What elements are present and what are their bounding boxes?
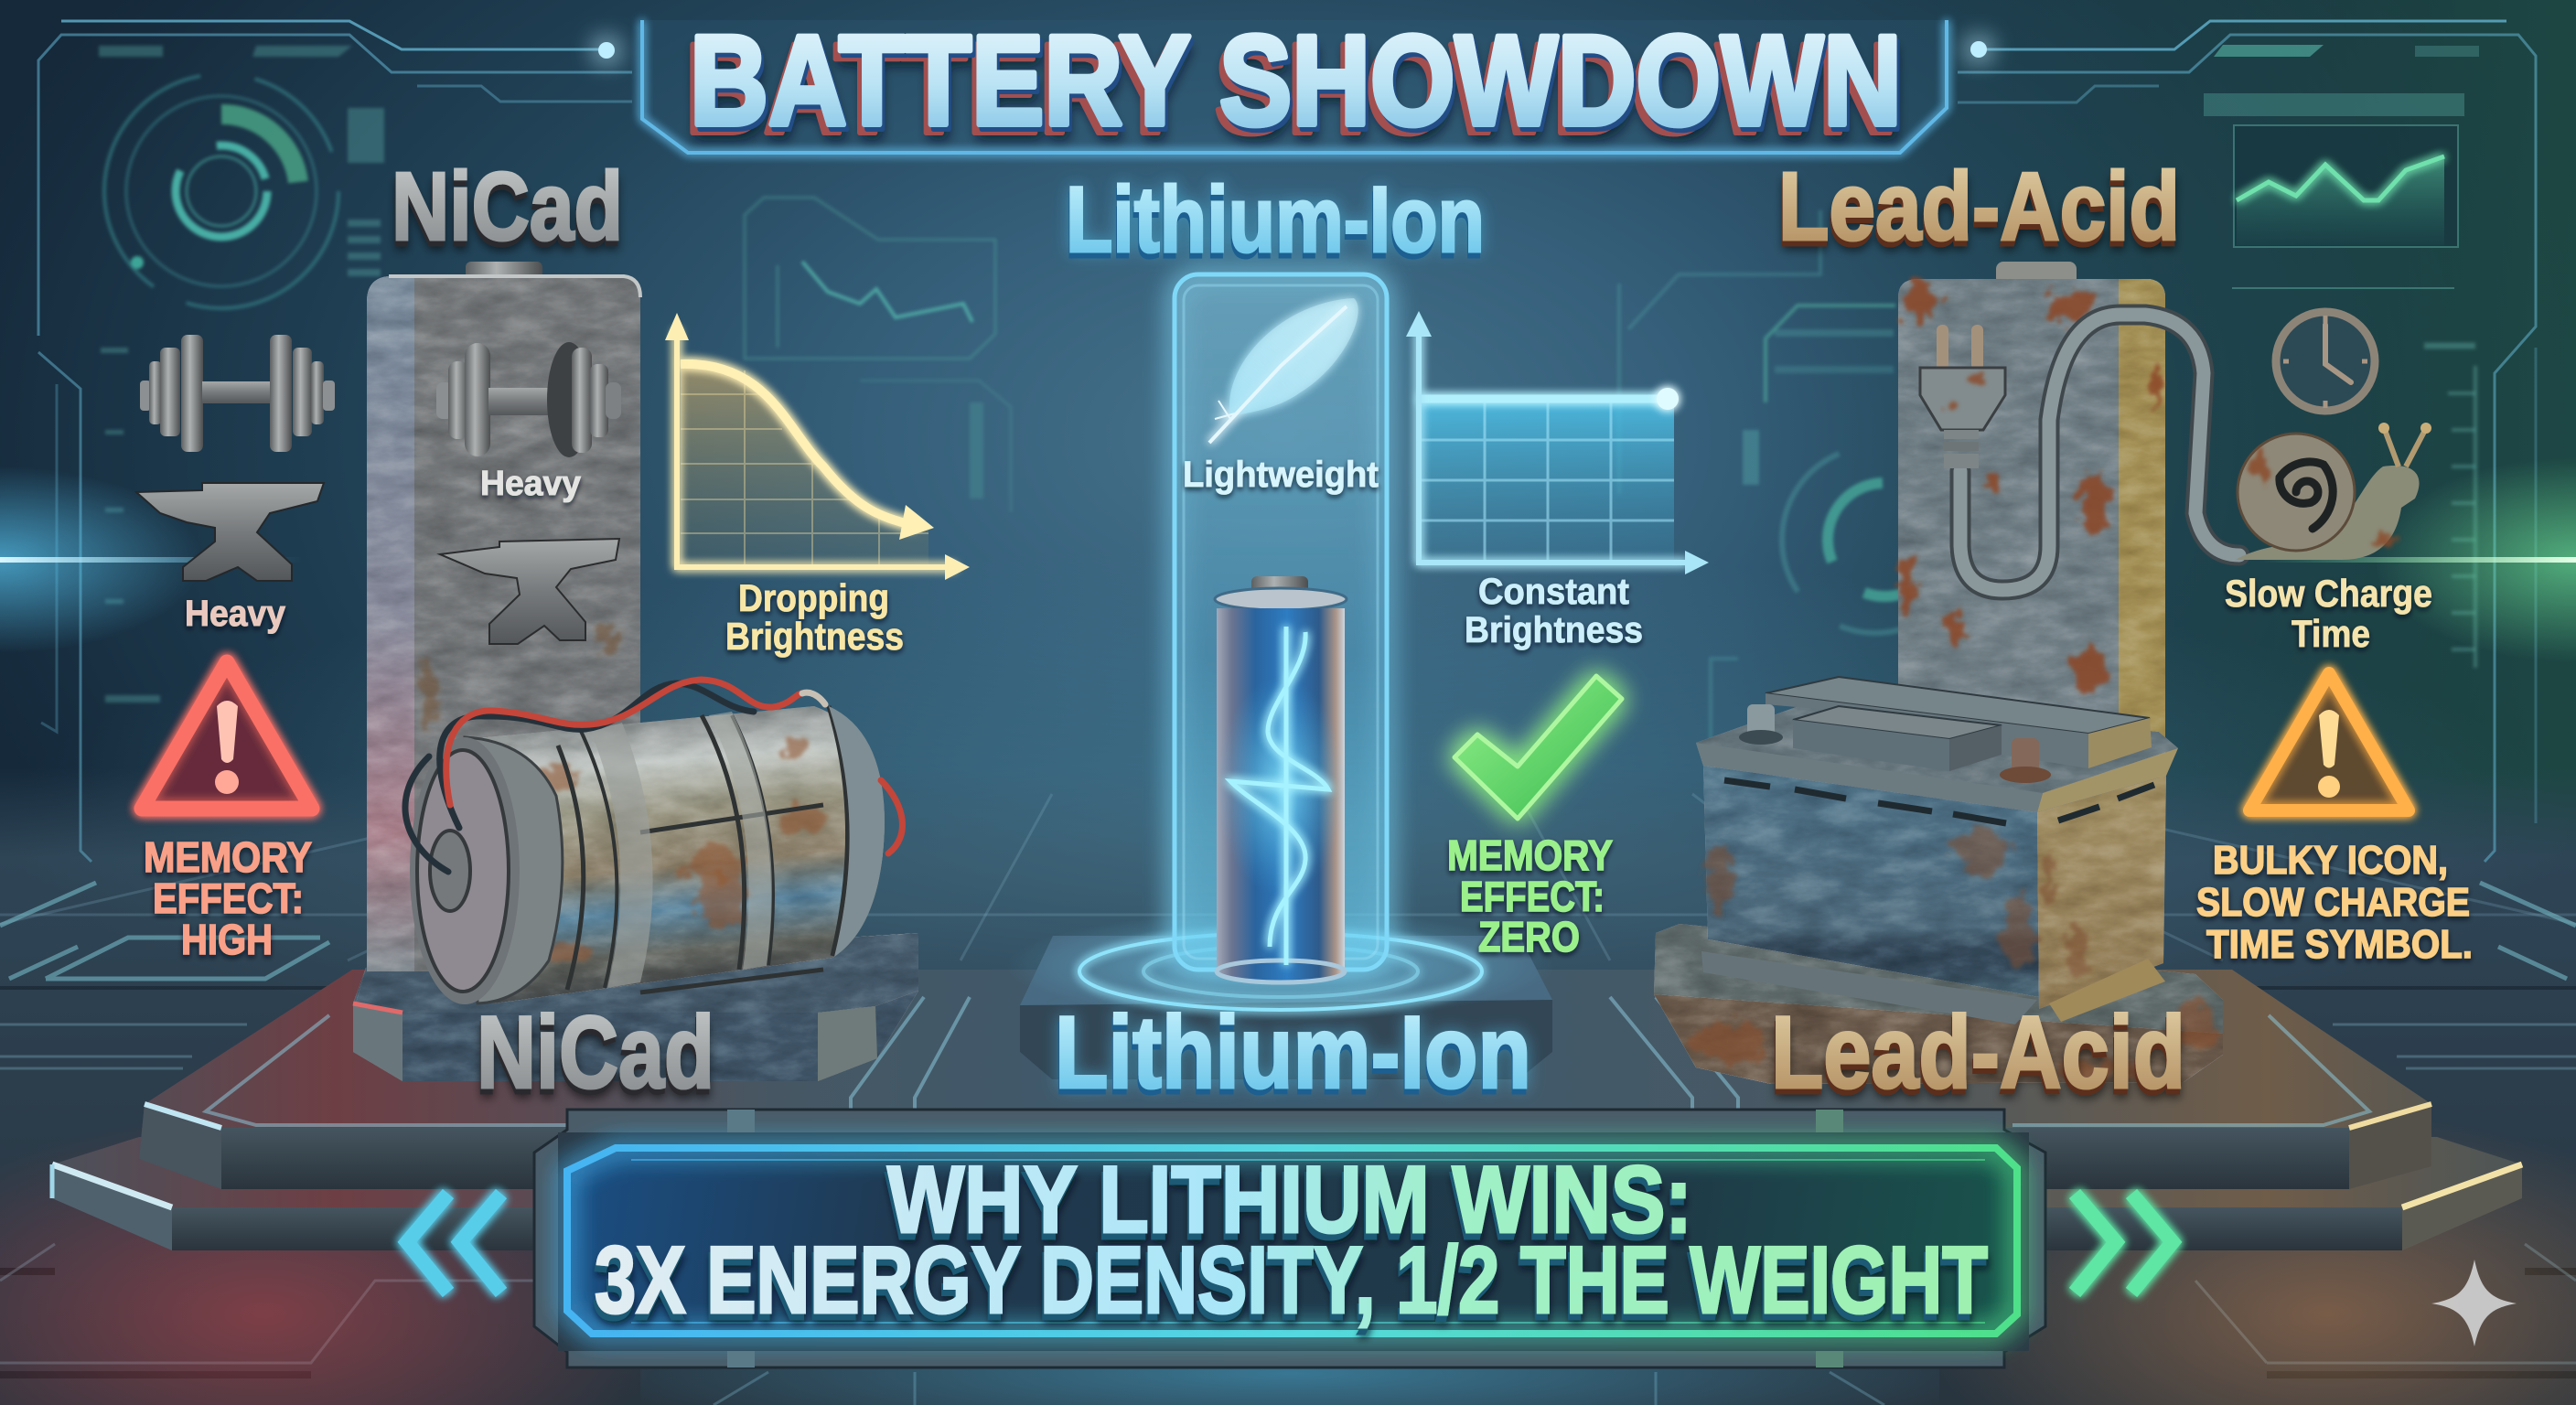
icon: plug [1920, 325, 2005, 468]
label: Heavy on slab: Heavy [480, 465, 581, 503]
icon: dumbbell [140, 335, 335, 452]
panel: constant brightness chart [1406, 311, 1709, 650]
label: bulky icon slow charge time symbol [2196, 838, 2473, 967]
icon: clock [2276, 312, 2375, 411]
label: Slow Charge Time: Slow Charge [2225, 572, 2432, 615]
floor [0, 549, 2576, 1405]
icon: anvil on slab [440, 539, 619, 644]
sparkle watermark [2431, 1260, 2517, 1346]
Lead-Acid heading: Lead-Acid [1778, 153, 2180, 261]
icon: snail [2236, 423, 2431, 560]
Lead-Acid base label: Lead-Acid [1771, 995, 2185, 1110]
label: Dropping Brightness: Dropping [738, 576, 889, 619]
label: Heavy: Heavy [185, 594, 286, 634]
memory effect zero: ZERO [1478, 913, 1580, 960]
Lead-Acid slab [1898, 262, 2165, 778]
ghost panels right of centre [1619, 210, 1969, 796]
NiCad wires [405, 680, 902, 872]
right HUD ruler [2424, 346, 2475, 668]
charging cable [1960, 315, 2239, 590]
icon: dumbbell on slab [436, 342, 621, 457]
icon: red warning triangle [142, 662, 312, 809]
panel: NiCad column [367, 262, 902, 1004]
title: BATTERY SHOWDOWN [690, 8, 1902, 152]
HUD line chart top right [2204, 45, 2479, 288]
panel: Lead-Acid right icons [2196, 312, 2473, 967]
icon: anvil [136, 483, 324, 581]
lithium cell [1215, 576, 1347, 982]
label: bulky icon slow charge time symbol: BULKY ICON, [2213, 838, 2448, 883]
banner headline [595, 1147, 1988, 1334]
panel: Lead-Acid column [1696, 262, 2239, 1024]
ghost chart behind NiCad [745, 198, 1011, 512]
glass panel [1175, 274, 1387, 970]
panel: dropping brightness chart [665, 313, 970, 658]
memory effect high [144, 833, 312, 963]
label: Slow Charge Time [2225, 572, 2432, 655]
left lens flare [0, 467, 402, 653]
Lead-Acid battery box [1696, 677, 2178, 1024]
bottom banner [534, 1110, 2045, 1367]
label: Dropping Brightness: Brightness [725, 615, 904, 658]
banner headline: WHY LITHIUM WINS: [887, 1147, 1692, 1253]
label: bulky icon slow charge time symbol: TIME SYMBOL. [2206, 922, 2473, 967]
icon: feather [1209, 298, 1358, 443]
icon: green check mark [1454, 676, 1622, 819]
label: Constant Brightness: Brightness [1465, 610, 1643, 650]
memory effect high: MEMORY [144, 833, 312, 881]
title frame [598, 20, 1987, 153]
label: Slow Charge Time: Time [2292, 612, 2370, 655]
decorative HUD circuit lines [38, 21, 2536, 862]
NiCad base plinth [353, 933, 918, 1081]
label: Constant Brightness: Constant [1478, 572, 1629, 612]
Lead-Acid base plinth [1654, 924, 2223, 1084]
label: bulky icon slow charge time symbol: SLOW CHARGE [2196, 880, 2470, 925]
label: Lightweight: Lightweight [1183, 455, 1379, 495]
Lithium-Ion base label: Lithium-Ion [1055, 995, 1531, 1110]
left HUD small readouts [99, 46, 384, 702]
panel: NiCad left icons [136, 335, 335, 963]
Lithium-Ion base plinth [1020, 936, 1552, 1079]
memory effect high: HIGH [181, 916, 273, 963]
memory effect high: EFFECT: [153, 874, 304, 922]
memory effect zero [1447, 831, 1613, 960]
icon: orange warning triangle [2249, 673, 2409, 810]
holographic rings [1079, 933, 1482, 1010]
right chevron arrows [2075, 1194, 2173, 1292]
memory effect zero: EFFECT: [1460, 873, 1605, 920]
banner headline: 3X ENERGY DENSITY, 1/2 THE WEIGHT [595, 1228, 1988, 1334]
NiCad heading: NiCad [392, 153, 623, 261]
left HUD ring gauge [104, 74, 338, 308]
memory effect zero: MEMORY [1447, 831, 1613, 879]
label: Dropping Brightness [725, 576, 904, 658]
NiCad battery slab [367, 262, 640, 971]
label: Constant Brightness [1465, 572, 1643, 650]
left chevron arrows [407, 1194, 501, 1292]
NiCad base label: NiCad [477, 995, 714, 1110]
NiCad barrel cell [410, 706, 885, 1004]
right lens flare [2174, 457, 2576, 662]
stepped platform [52, 970, 2522, 1250]
panel: Lithium-Ion glass column [1006, 274, 1555, 1021]
Lithium-Ion heading: Lithium-Ion [1066, 167, 1485, 272]
